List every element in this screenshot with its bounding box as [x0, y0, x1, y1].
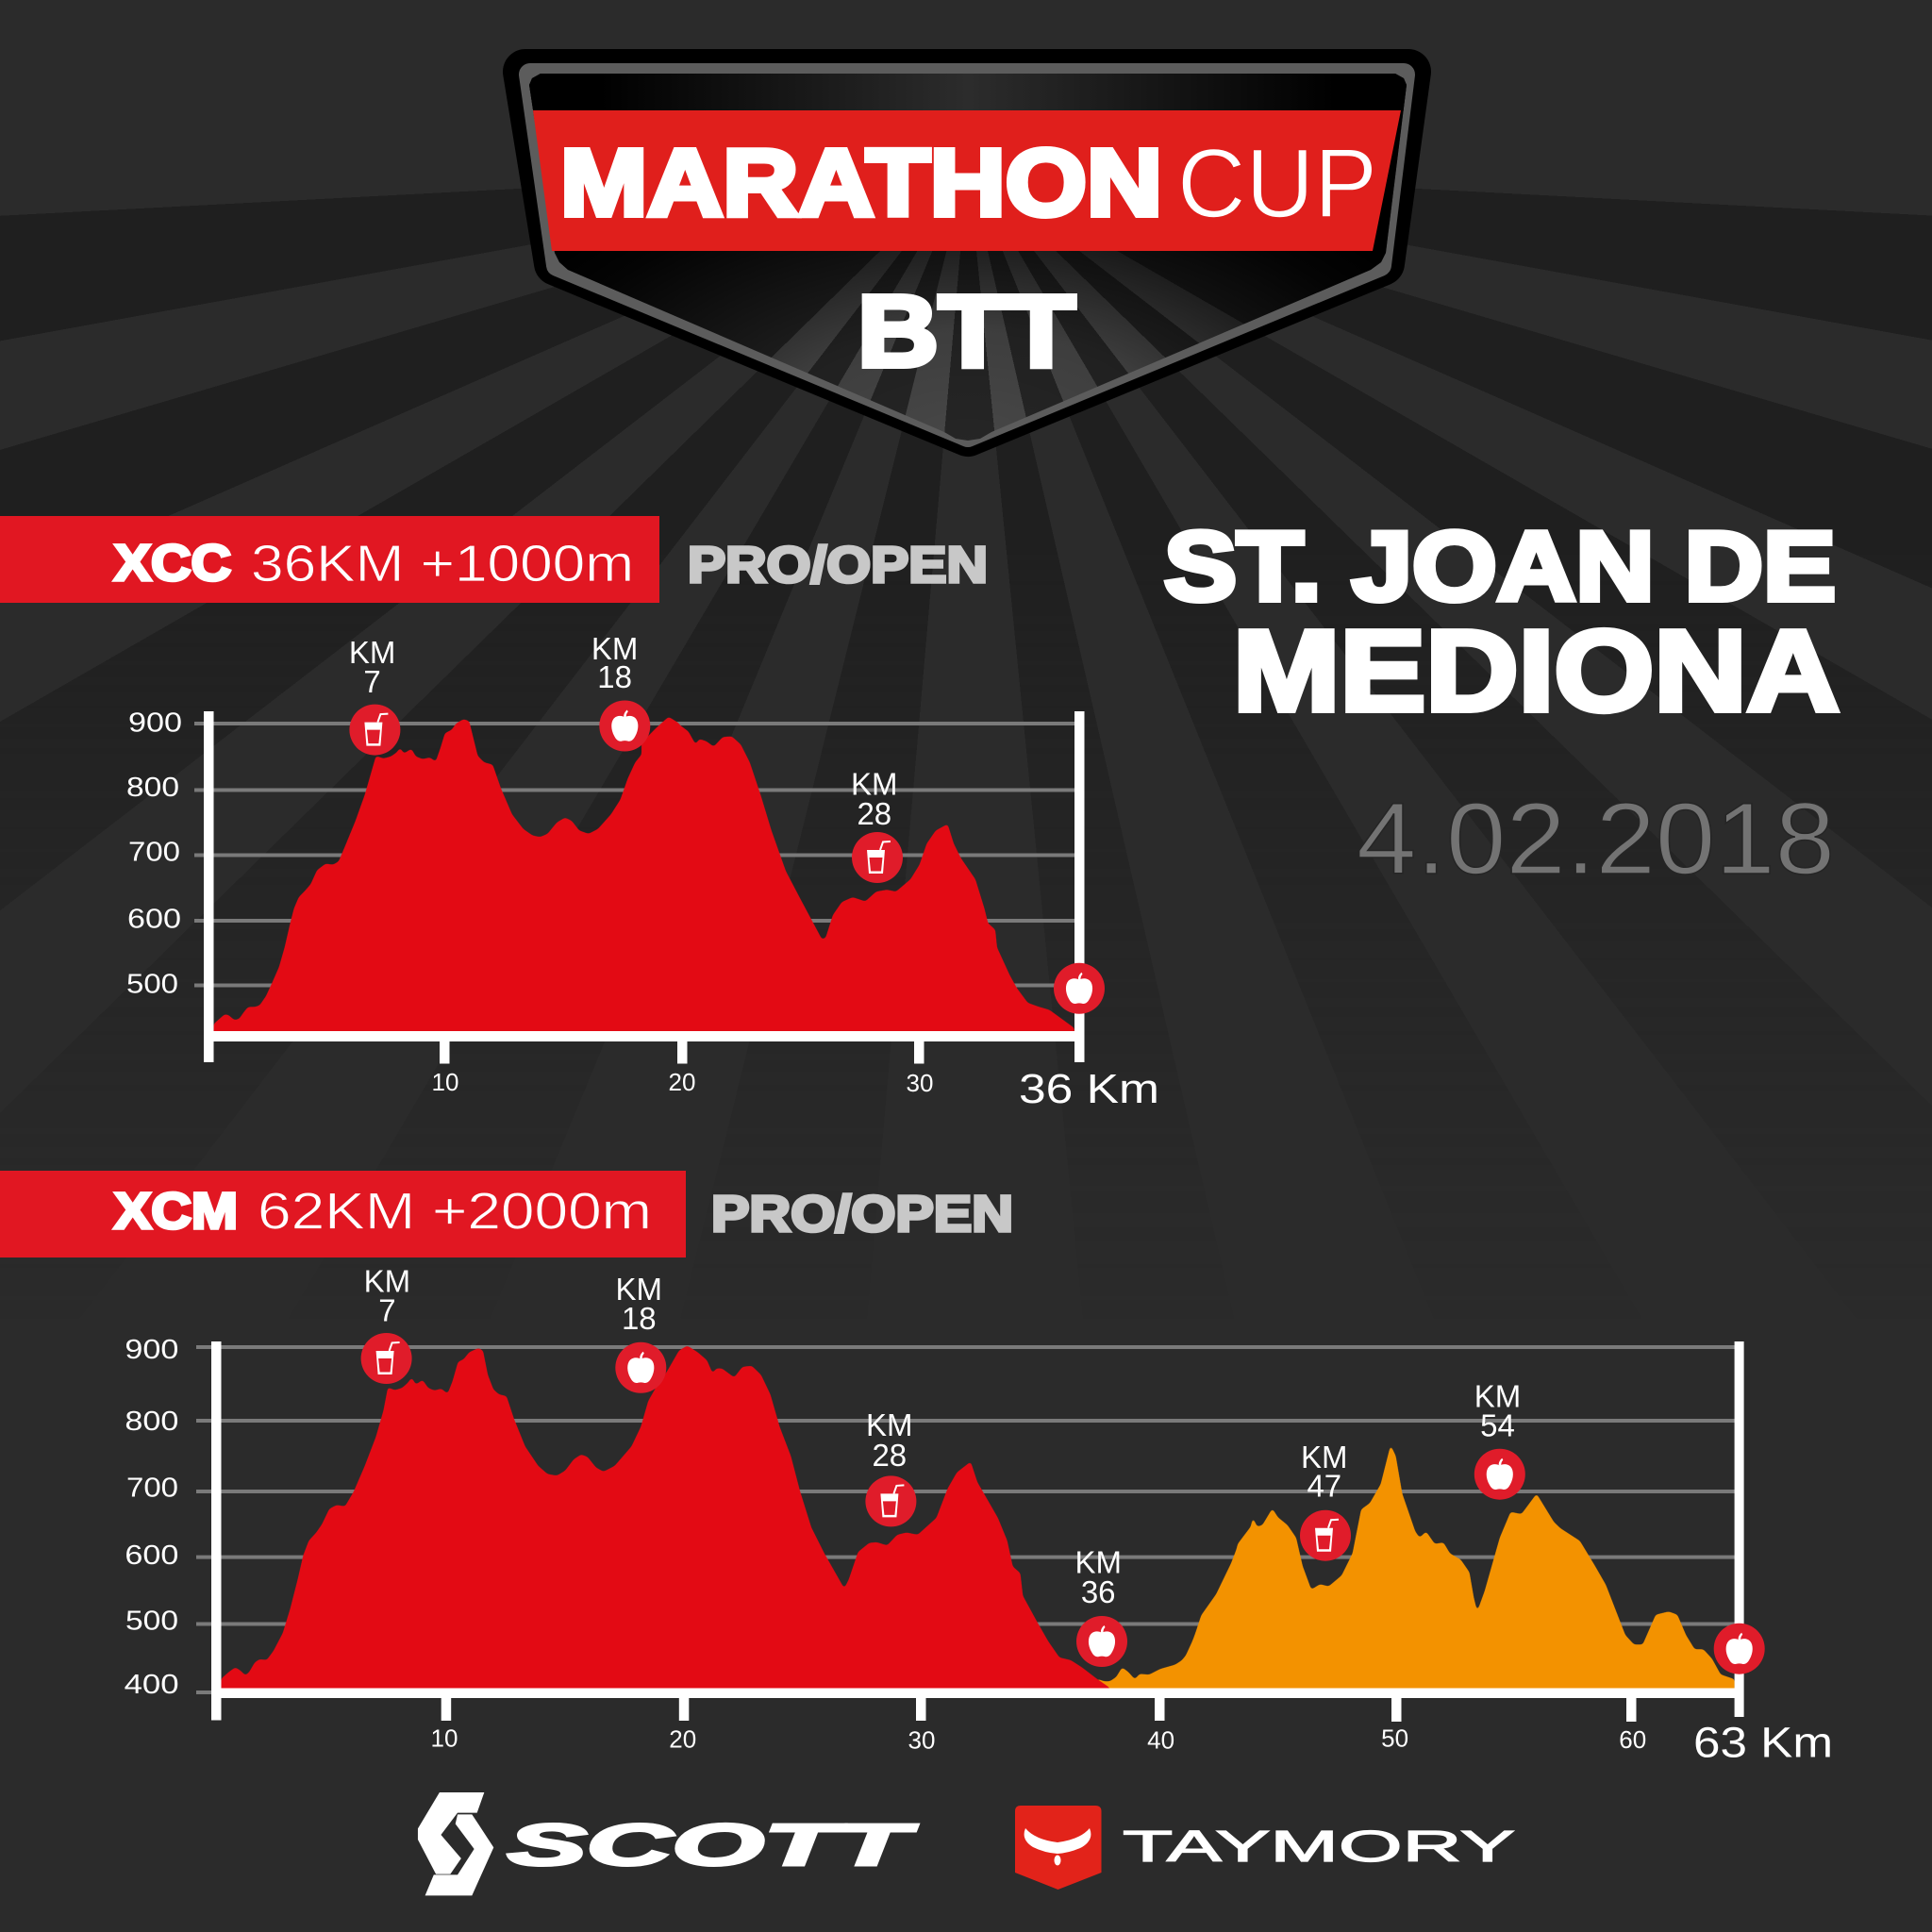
marker KM 36 food: KM — [1074, 1545, 1122, 1579]
x axis labels: 63 Km — [1693, 1719, 1833, 1767]
marker KM 7 drink: 7 — [378, 1293, 396, 1328]
x axis labels: 10 — [432, 1068, 458, 1096]
marker KM 7 drink — [349, 635, 400, 756]
marker KM 18 food: 18 — [597, 659, 632, 694]
category label XCC: PRO/OPEN — [688, 537, 988, 593]
marker KM 28 drink: 28 — [857, 796, 891, 831]
x axis labels — [431, 1719, 1833, 1767]
marker KM 54 food: KM — [1474, 1379, 1521, 1414]
marker finish food — [1714, 1624, 1765, 1674]
y axis labels: 500 — [125, 1607, 178, 1637]
marker KM 36 food — [1074, 1545, 1127, 1667]
icon: Scott S mark — [418, 1792, 493, 1895]
elevation profile orange — [1097, 1445, 1735, 1691]
x axis labels: 20 — [669, 1724, 696, 1753]
y axis labels: 900 — [128, 708, 182, 738]
event title: St. Joan de Mediona: MEDIONA — [1233, 607, 1840, 735]
elevation chart: XCC 36 km — [126, 631, 1159, 1112]
Taymory wordmark: TAYMORY — [1123, 1822, 1515, 1871]
badge text and red band — [533, 110, 1401, 388]
x axis labels: 60 — [1619, 1725, 1646, 1754]
marker KM 28 drink: 28 — [872, 1438, 907, 1473]
heading banner: XCM: XCM — [114, 1183, 238, 1240]
icon: Taymory shield — [1015, 1806, 1102, 1890]
y axis labels: 900 — [125, 1335, 178, 1365]
category label XCM: PRO/OPEN — [711, 1186, 1013, 1242]
y axis labels — [126, 708, 182, 1000]
y axis labels: 500 — [126, 970, 178, 1000]
logo badge: Marathon Cup BTT — [503, 49, 1431, 457]
x axis labels: 30 — [908, 1725, 935, 1754]
grid lines — [196, 1345, 1736, 1694]
sponsor logo: Taymory — [1015, 1806, 1515, 1890]
elevation profile red — [214, 717, 1074, 1035]
MARATHON: MARATHON — [560, 130, 1162, 236]
marker KM 7 drink: 7 — [363, 664, 381, 699]
x axis labels: 40 — [1147, 1725, 1174, 1754]
marker KM 54 food: 54 — [1480, 1408, 1515, 1443]
axes — [204, 711, 1085, 1064]
marker KM 28 drink — [851, 766, 903, 883]
y axis labels: 600 — [127, 905, 181, 935]
marker KM 28 drink — [865, 1407, 916, 1526]
badge frame — [503, 49, 1431, 457]
marker KM 47 drink: 47 — [1307, 1469, 1341, 1504]
x axis labels: 10 — [431, 1724, 458, 1753]
event date: 4.02.2018 — [1357, 781, 1835, 895]
top shaded band — [529, 74, 1407, 111]
background rays — [0, 189, 1932, 753]
marker KM 7 drink: KM — [349, 635, 395, 670]
elevation chart: XCM 62 km — [125, 1264, 1833, 1767]
Scott wordmark: SCOTT — [508, 1813, 918, 1878]
event title: St. Joan de Mediona: ST. JOAN DE — [1164, 512, 1836, 622]
badge interior with rays — [529, 74, 1407, 444]
y axis labels: 700 — [128, 837, 180, 867]
marker KM 18 food — [615, 1272, 666, 1393]
marker KM 36 food: 36 — [1081, 1574, 1116, 1609]
x axis labels — [432, 1066, 1159, 1112]
red band — [533, 110, 1401, 251]
y axis labels: 800 — [125, 1407, 178, 1437]
y axis labels: 600 — [125, 1541, 178, 1571]
y axis labels: 700 — [126, 1474, 178, 1504]
marker KM 28 drink: KM — [866, 1407, 913, 1442]
marker KM 54 food — [1474, 1379, 1525, 1500]
marker KM 28 drink: KM — [851, 766, 898, 802]
grid lines — [194, 722, 1075, 987]
marker KM 7 drink: KM — [364, 1264, 410, 1299]
y axis labels: 400 — [125, 1670, 179, 1700]
heading banner: XCC: 36KM +1000m — [251, 534, 634, 592]
heading banner: XCC: XCC — [114, 535, 231, 591]
marker KM 18 food — [591, 631, 650, 751]
x axis labels: 50 — [1381, 1724, 1408, 1753]
y axis labels — [125, 1335, 179, 1700]
sponsor logo: Scott — [418, 1792, 918, 1895]
heading banner: XCC — [0, 516, 659, 603]
x axis labels: 30 — [907, 1069, 933, 1097]
marker KM 47 drink: KM — [1301, 1440, 1348, 1474]
elevation profile red — [221, 1345, 1109, 1691]
marker KM 18 food: KM — [616, 1272, 662, 1307]
y axis labels: 800 — [126, 773, 179, 803]
marker KM 47 drink — [1300, 1440, 1351, 1561]
heading banner: XCM: 62KM +2000m — [258, 1182, 652, 1241]
heading banner: XCM — [0, 1171, 686, 1257]
marker KM 7 drink — [361, 1264, 412, 1384]
x axis labels: 36 Km — [1019, 1066, 1159, 1112]
marker finish food — [1054, 963, 1105, 1014]
event title: St. Joan de Mediona — [1164, 512, 1840, 735]
axes — [211, 1341, 1744, 1722]
marker KM 18 food: 18 — [622, 1301, 657, 1336]
CUP: CUP — [1177, 129, 1377, 239]
marker KM 18 food: KM — [591, 631, 638, 666]
x axis labels: 20 — [669, 1068, 695, 1096]
BTT: BTT — [858, 274, 1075, 388]
